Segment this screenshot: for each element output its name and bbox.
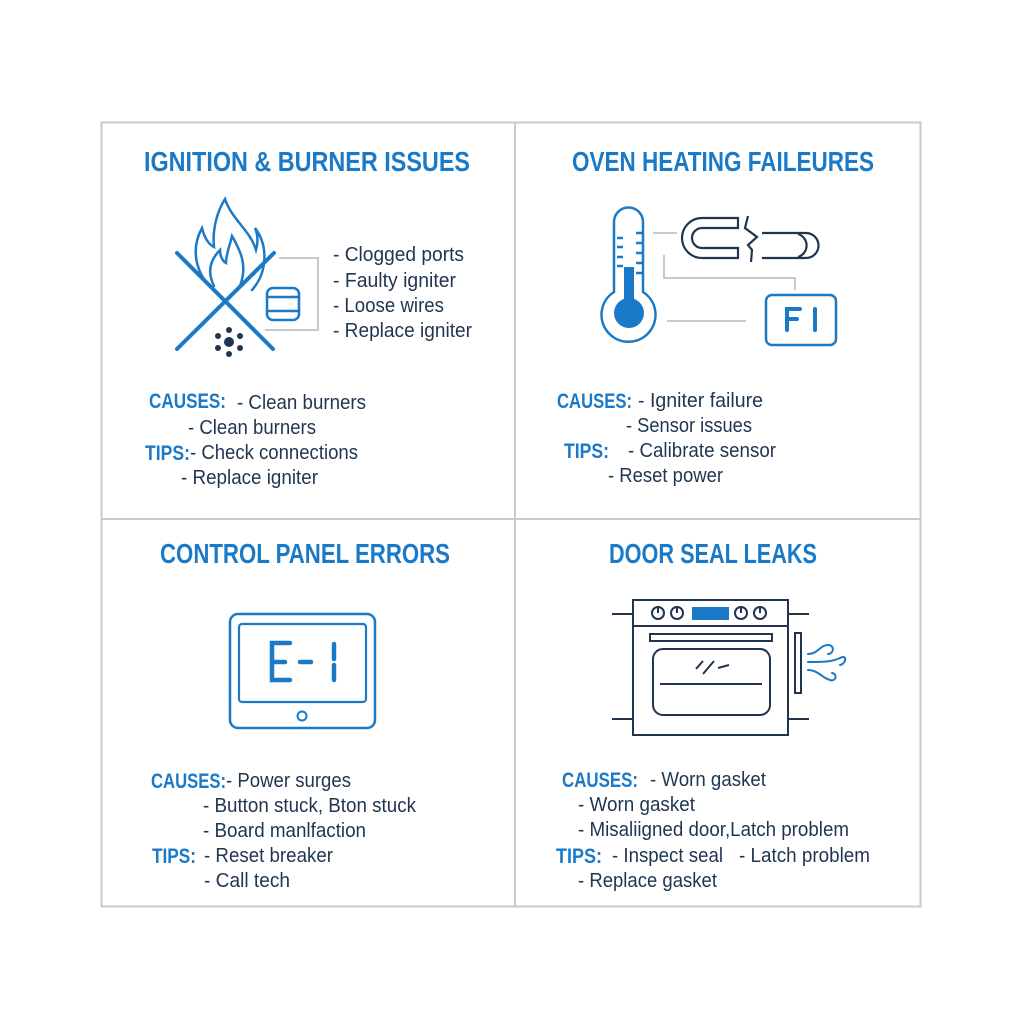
text: causes & tips oven: - Reset power [608,465,723,487]
text: causes & tips control: CAUSES: [151,770,226,793]
text: causes & tips control: - Power surges [226,770,351,792]
text: causes & tips door: - Latch problem [739,845,870,867]
text: causes & tips oven: CAUSES: [557,390,632,413]
icon: oven with air leak [612,600,809,735]
text: causes & tips oven: - Sensor issues [626,415,752,437]
text: causes & tips ignition: CAUSES: [149,390,226,413]
text: causes & tips oven: - Igniter failure [638,390,763,412]
text: causes & tips control: - Button stuck, Bton stuck [203,795,417,817]
text: causes & tips oven: - Calibrate sensor [628,440,776,462]
text: causes & tips ignition: - Clean burners [237,392,366,414]
list: ignition symptoms [333,244,472,342]
icon: tablet E-1 [230,614,375,728]
text: causes & tips control [151,770,417,892]
text: causes & tips control: - Call tech [204,870,290,892]
text: causes & tips control: - Reset breaker [204,845,333,867]
text: causes & tips door: - Worn gasket [650,769,766,791]
text: causes & tips ignition [145,390,366,489]
text: causes & tips ignition: - Replace igniter [181,467,318,489]
panel: oven heating failures [557,146,874,487]
text: causes & tips door: - Misaliigned door,Latch problem [578,819,849,841]
title: door seal: DOOR SEAL LEAKS [609,538,817,569]
list: ignition symptoms: - Replace igniter [333,320,472,342]
list: ignition symptoms: - Clogged ports [333,244,464,266]
text: causes & tips door: - Worn gasket [578,794,695,816]
icon: thermometer [602,208,656,342]
text: causes & tips oven [557,390,776,487]
list: ignition symptoms: - Faulty igniter [333,270,456,292]
text: causes & tips door: TIPS: [556,845,602,868]
icon: debris dots [215,327,243,357]
text: causes & tips control: - Board manlfaction [203,820,366,842]
title: ignition: IGNITION & BURNER ISSUES [144,146,470,177]
text: causes & tips oven: TIPS: [564,440,609,463]
title: oven heating: OVEN HEATING FAILEURES [572,146,874,177]
text: causes & tips door: - Replace gasket [578,870,717,892]
icon: crossed flame [177,199,299,349]
text: causes & tips door [556,769,870,892]
list: ignition symptoms: - Loose wires [333,295,444,317]
text: causes & tips control: TIPS: [152,845,196,868]
panel: control panel errors [151,538,450,892]
title: control panel: CONTROL PANEL ERRORS [160,538,450,569]
text: causes & tips door: CAUSES: [562,769,638,792]
panel: ignition & burner issues [144,146,472,489]
icon: magnet and spark [682,216,818,262]
text: causes & tips ignition: - Check connections [190,442,358,464]
text: causes & tips door: - Inspect seal [612,845,723,867]
panel: door seal leaks [556,538,870,892]
icon: F1 display [766,295,836,345]
text: causes & tips ignition: TIPS: [145,442,190,465]
text: causes & tips ignition: - Clean burners [188,417,316,439]
